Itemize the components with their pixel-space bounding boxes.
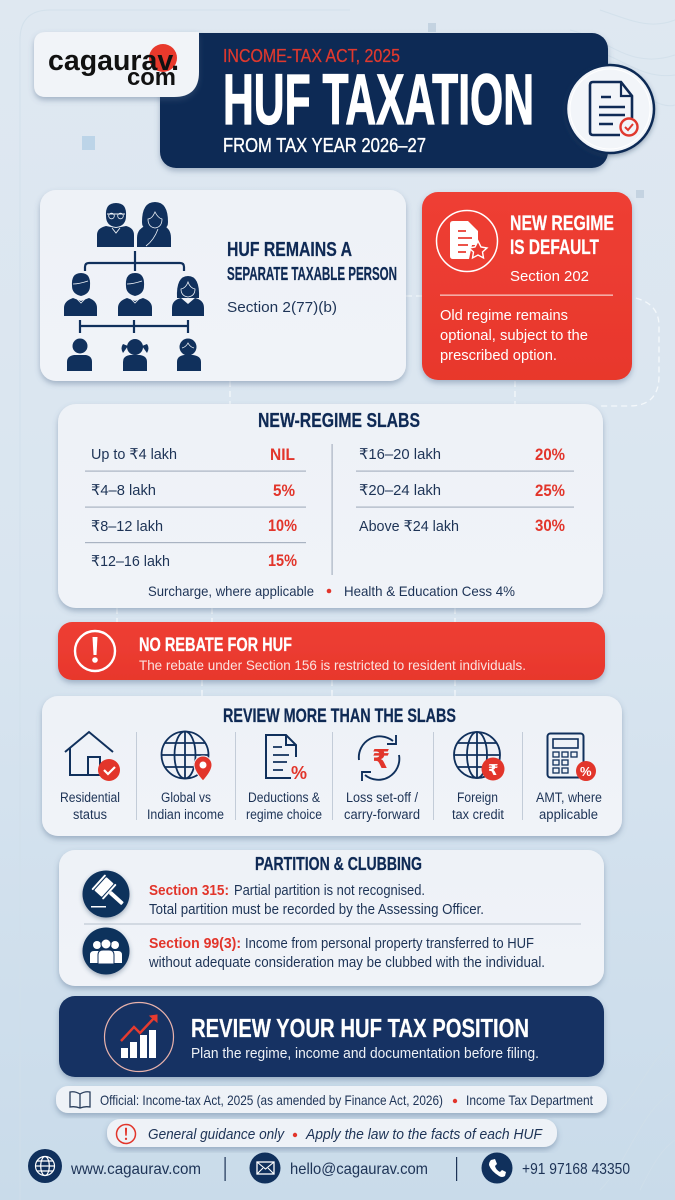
slab table right: [359, 445, 565, 535]
contact: phone: [482, 1152, 630, 1184]
icon: gavel: [82, 870, 130, 918]
source pill: [56, 1086, 607, 1113]
slabs heading: NEW-REGIME SLABS: [258, 410, 420, 432]
slab table left: NIL: [270, 445, 295, 464]
logo card: [34, 32, 199, 97]
item: deductions and regime choice: Deductions &: [248, 790, 320, 805]
panel: review more than the slabs: [42, 696, 622, 836]
item: foreign tax credit: [452, 732, 504, 822]
item: amt where applicable: AMT, where: [536, 790, 602, 805]
call to action: REVIEW YOUR HUF TAX POSITION: [191, 1013, 529, 1043]
item: loss set-off and carry-forward: ₹: [372, 744, 390, 774]
slab table right: ₹16–20 lakh: [359, 446, 441, 463]
slab table right: 30%: [535, 516, 565, 535]
rule: section 99(3): without adequate consideration may be clubbed with the individual.: [148, 955, 545, 971]
item: foreign tax credit: tax credit: [452, 807, 504, 822]
slab table left: ₹8–12 lakh: [91, 518, 163, 535]
item: loss set-off and carry-forward: carry-forward: [344, 807, 420, 822]
panel: new regime default: IS DEFAULT: [510, 236, 599, 259]
slab table left: 5%: [273, 481, 295, 500]
panel: partition and clubbing: [59, 850, 604, 986]
slabs footnote: Surcharge, where applicable: [148, 583, 314, 599]
call to action: Plan the regime, income and documentation before filing.: [191, 1045, 539, 1062]
red panel body: prescribed option.: [440, 347, 557, 364]
source pill: Official: Income-tax Act, 2025 (as amended by Finance Act, 2026): [100, 1092, 443, 1108]
panel: new-regime slabs: [58, 404, 603, 608]
item: deductions and regime choice: [246, 735, 322, 822]
source pill: Income Tax Department: [466, 1092, 593, 1108]
icon: document badge: [566, 65, 654, 153]
header eyebrow: INCOME-TAX ACT, 2025: [223, 46, 400, 66]
panel: separate taxable person: [40, 190, 406, 381]
rule: section 315: [149, 882, 484, 918]
slab table left: 15%: [268, 551, 297, 570]
icon: growth chart: [104, 1002, 174, 1072]
disclaimer pill: Apply the law to the facts of each HUF: [305, 1126, 543, 1143]
item: residential status: [60, 732, 120, 822]
contact: email: [250, 1152, 428, 1184]
logo card: cagaurav.: [48, 45, 179, 77]
slab table left: 10%: [268, 516, 297, 535]
red panel body: optional, subject to the: [440, 327, 588, 344]
call to action: [59, 996, 604, 1077]
rule: section 99(3): Section 99(3):: [149, 935, 241, 952]
item: residential status: Residential: [60, 790, 120, 805]
disclaimer pill: [107, 1119, 557, 1147]
item: foreign tax credit: ₹: [488, 762, 498, 779]
red panel heading: NEW REGIME: [510, 212, 614, 235]
icon: book: [70, 1092, 90, 1108]
panel: new regime default: [422, 192, 632, 380]
contact: phone: +91 97168 43350: [522, 1161, 630, 1178]
contact: email: hello@cagaurav.com: [290, 1161, 428, 1178]
item: global vs indian income: [147, 732, 224, 822]
item: deductions and regime choice: regime choice: [246, 807, 322, 822]
slab table left: Up to ₹4 lakh: [91, 446, 177, 463]
slab table right: 20%: [535, 445, 565, 464]
slab table left: ₹4–8 lakh: [91, 482, 156, 499]
slab table right: ₹20–24 lakh: [359, 482, 441, 499]
item: loss set-off and carry-forward: [344, 735, 420, 822]
icon: exclamation: [75, 631, 115, 671]
rule: section 99(3): Income from personal property transferred to HUF: [245, 936, 534, 952]
logo card: com: [127, 64, 176, 91]
slab table left: ₹12–16 lakh: [91, 553, 170, 570]
rule: section 315: Total partition must be recorded by the Assessing Officer.: [149, 902, 484, 918]
red panel body: Old regime remains: [440, 307, 568, 324]
rule: section 99(3): [148, 935, 545, 971]
footer contacts: [28, 1149, 630, 1184]
callout: no rebate: NO REBATE FOR HUF: [139, 635, 292, 656]
item: global vs indian income: Indian income: [147, 807, 224, 822]
item: loss set-off and carry-forward: Loss set-off /: [346, 790, 418, 805]
item: amt where applicable: [536, 734, 602, 822]
item: residential status: status: [73, 807, 107, 822]
panel subheading: SEPARATE TAXABLE PERSON: [227, 264, 397, 284]
header subtitle: FROM TAX YEAR 2026–27: [223, 135, 426, 157]
slabs footnote: [148, 583, 515, 599]
icon: people: [82, 928, 130, 974]
icon: warning: [116, 1124, 136, 1144]
callout: no rebate: [58, 622, 605, 680]
section reference: Section 2(77)(b): [227, 299, 337, 316]
slab table left: [91, 445, 297, 570]
item: deductions and regime choice: %: [291, 763, 307, 783]
callout: no rebate: The rebate under Section 156 is restricted to resident individuals.: [139, 657, 526, 673]
family tree icon: [64, 202, 204, 371]
rule: section 315: Section 315:: [149, 882, 229, 899]
red panel body: [440, 307, 588, 364]
panel: new regime default: Section 202: [510, 268, 589, 285]
item: amt where applicable: %: [580, 764, 592, 779]
slab table right: Above ₹24 lakh: [359, 518, 459, 535]
item: global vs indian income: Global vs: [161, 790, 211, 805]
slabs footnote: Health & Education Cess 4%: [344, 583, 515, 599]
slab table right: 25%: [535, 481, 565, 500]
contact: website: [28, 1149, 201, 1183]
item: foreign tax credit: Foreign: [457, 790, 498, 805]
review heading: REVIEW MORE THAN THE SLABS: [223, 706, 456, 727]
partition heading: PARTITION & CLUBBING: [255, 854, 422, 874]
contact: website: www.cagaurav.com: [70, 1161, 201, 1178]
panel heading: HUF REMAINS A: [227, 239, 352, 261]
rule: section 315: Partial partition is not recognised.: [234, 883, 425, 899]
disclaimer pill: General guidance only: [148, 1126, 285, 1143]
item: amt where applicable: applicable: [539, 807, 598, 822]
icon: document star: [436, 210, 498, 272]
header banner: [160, 33, 608, 168]
